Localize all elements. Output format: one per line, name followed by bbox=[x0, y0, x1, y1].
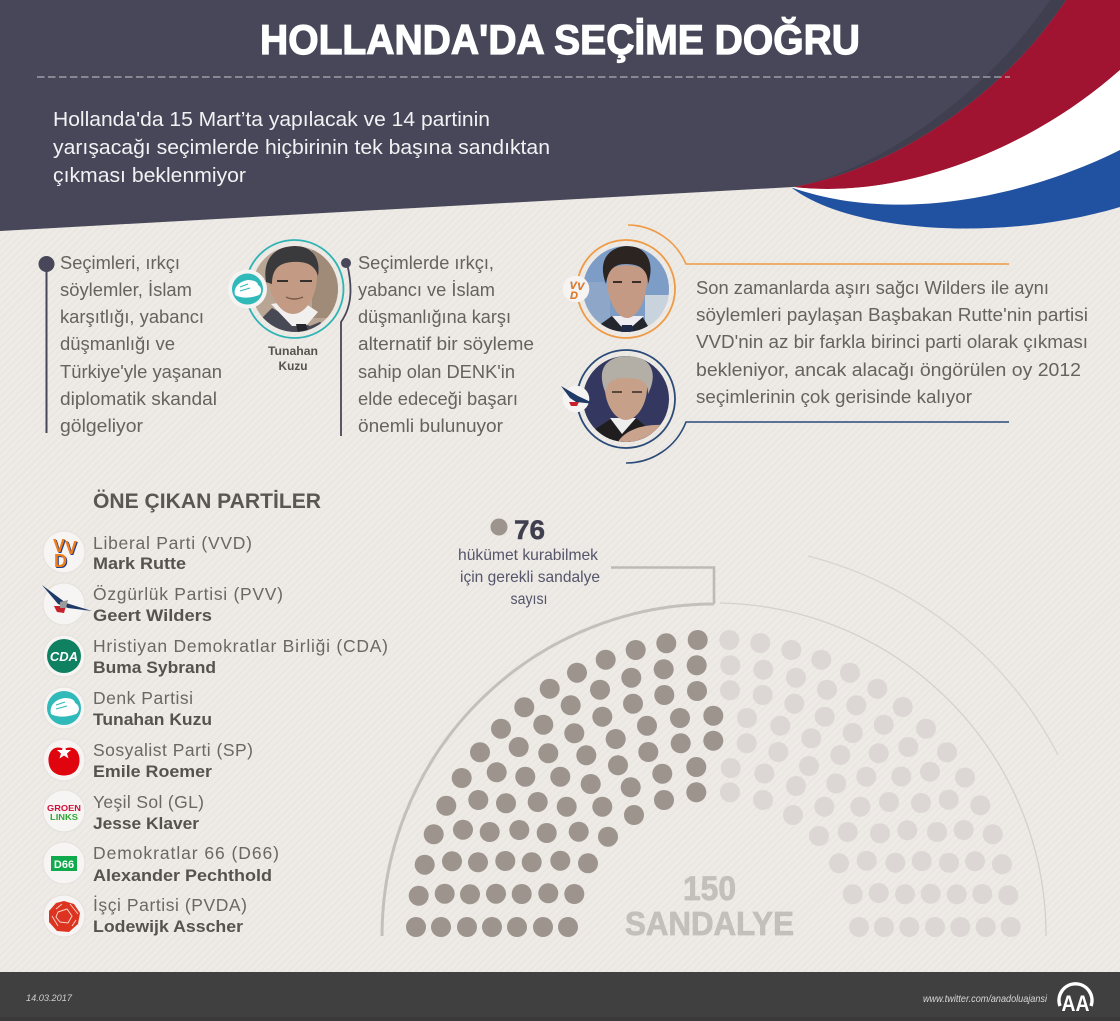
title divider bbox=[37, 76, 1010, 78]
party: Denk: Tunahan Kuzu bbox=[93, 710, 212, 729]
navy arc bbox=[626, 422, 1009, 463]
callout: 76 seats: hükümet kurabilmek bbox=[458, 547, 599, 564]
portrait caption: Kuzu bbox=[278, 359, 308, 373]
party: Denk bbox=[43, 687, 212, 729]
flag: white stripe bbox=[793, 70, 1120, 205]
text block: right column: Son zamanlarda aşırı sağcı Wilders ile aynı bbox=[696, 278, 1049, 298]
header band bbox=[0, 0, 1120, 231]
text block: middle column: düşmanlığına karşı bbox=[358, 307, 511, 327]
portrait: Geert Wilders bbox=[561, 350, 1009, 463]
party: D66: Alexander Pechthold bbox=[93, 866, 272, 885]
intro text: yarışacağı seçimlerde hiçbirinin tek başına sandıktan bbox=[53, 136, 550, 159]
party: VVD bbox=[43, 531, 252, 573]
intro text bbox=[53, 108, 550, 187]
party: SP bbox=[43, 739, 253, 781]
portrait: Tunahan Kuzu bbox=[228, 240, 344, 338]
badge: PVV bbox=[561, 386, 595, 412]
text block: right column bbox=[696, 278, 1088, 407]
party: PVDA bbox=[43, 895, 247, 937]
text block: middle column: yabancı ve İslam bbox=[358, 280, 495, 300]
text block: middle column: elde edeceği başarı bbox=[358, 389, 518, 409]
party: GL: Yeşil Sol (GL) bbox=[93, 792, 204, 812]
party: PVV bbox=[42, 583, 283, 625]
party: VVD: Liberal Parti (VVD) bbox=[93, 533, 252, 553]
portrait: Mark Rutte bbox=[563, 225, 1009, 338]
party: SP: Emile Roemer bbox=[93, 762, 212, 781]
bullet line bbox=[38, 256, 54, 433]
text block: middle column: alternatif bir söyleme bbox=[358, 334, 534, 354]
callout: 76 seats bbox=[458, 515, 600, 608]
party: PVV: Geert Wilders bbox=[93, 606, 212, 625]
party list bbox=[42, 531, 388, 937]
arc: parliament thin right bbox=[720, 603, 1046, 936]
party: PVDA: Lodewijk Asscher bbox=[93, 917, 243, 936]
heading: featured parties: ÖNE ÇIKAN PARTİLER bbox=[93, 490, 321, 513]
party: PVV: Özgürlük Partisi (PVV) bbox=[93, 584, 283, 604]
party: CDA: CDA bbox=[50, 649, 78, 664]
flag: blue stripe bbox=[792, 150, 1120, 229]
badge: VVD: D bbox=[570, 290, 578, 302]
bracket connector bbox=[611, 568, 714, 604]
party: GL: Jesse Klaver bbox=[93, 814, 199, 833]
portrait caption bbox=[268, 344, 318, 373]
intro text: Hollanda'da 15 Mart’ta yapılacak ve 14 partinin bbox=[53, 108, 490, 131]
text block: left column: düşmanlığı ve bbox=[60, 334, 175, 354]
text block: right column: seçimlerinin çok gerisinde kalıyor bbox=[696, 387, 972, 407]
date: 14.03.2017 bbox=[26, 993, 73, 1004]
badge: VVD bbox=[563, 276, 589, 302]
party: GL: LINKS bbox=[50, 812, 78, 822]
text block: left column: diplomatik skandal bbox=[60, 389, 217, 409]
party: D66: Demokratlar 66 (D66) bbox=[93, 843, 279, 863]
text block: middle column: Seçimlerde ırkçı, bbox=[358, 253, 494, 273]
badge: VVD: V bbox=[570, 280, 578, 292]
text block: right column: söylemleri paylaşan Başbakan Rutte'nin partisi bbox=[696, 305, 1088, 325]
callout: 76 seats: için gerekli sandalye bbox=[460, 569, 600, 586]
party: Denk: Denk Partisi bbox=[93, 688, 193, 708]
party: VVD: Mark Rutte bbox=[93, 554, 186, 573]
badge: VVD: V bbox=[577, 281, 586, 293]
twitter address: www.twitter.com/anadoluajansi bbox=[923, 993, 1048, 1005]
party: GL bbox=[43, 790, 204, 833]
icon: AA logo bbox=[1059, 984, 1092, 1016]
flag curve: shadow bbox=[793, 0, 1066, 187]
portrait caption: Tunahan bbox=[268, 344, 318, 358]
party: VVD: V bbox=[53, 536, 65, 556]
badge: Denk bbox=[228, 270, 267, 308]
text block: left column: Seçimleri, ırkçı bbox=[60, 253, 180, 273]
seats: majority 76 bbox=[406, 630, 723, 937]
text block: left column bbox=[38, 253, 222, 436]
total seats label bbox=[625, 870, 794, 942]
text block: middle column: sahip olan DENK'in bbox=[358, 362, 515, 382]
party: CDA: Buma Sybrand bbox=[93, 658, 216, 677]
icon: AA logo: AA bbox=[1062, 991, 1090, 1016]
callout: 76 seats: 76 bbox=[514, 515, 545, 545]
text block: middle column: önemli bulunuyor bbox=[358, 416, 503, 436]
text block: middle column bbox=[341, 253, 534, 436]
footer bar bbox=[0, 972, 1120, 1021]
party: PVDA: İşçi Partisi (PVDA) bbox=[93, 895, 247, 915]
title: HOLLANDA'DA SEÇİME DOĞRU bbox=[260, 16, 860, 63]
flag: red stripe bbox=[793, 0, 1120, 189]
text block: left column: söylemler, İslam bbox=[60, 280, 192, 300]
party: D66: D66 bbox=[54, 859, 74, 871]
orange arc bbox=[628, 225, 1009, 264]
text block: left column: karşıtlığı, yabancı bbox=[60, 307, 204, 327]
party: CDA bbox=[43, 635, 388, 677]
intro text: çıkması beklenmiyor bbox=[53, 164, 246, 187]
text block: left column: Türkiye'yle yaşanan bbox=[60, 362, 222, 382]
party: VVD: V bbox=[65, 538, 77, 558]
arc: outer thin bbox=[808, 556, 1058, 755]
callout: 76 seats: sayısı bbox=[510, 591, 548, 608]
party: D66 bbox=[43, 842, 279, 885]
party: VVD: D bbox=[54, 551, 67, 571]
total seats label: SANDALYE bbox=[625, 905, 794, 942]
text block: left column: gölgeliyor bbox=[60, 416, 143, 436]
bullet line bbox=[341, 258, 351, 436]
party: SP: Sosyalist Parti (SP) bbox=[93, 740, 253, 760]
party: GL: GROEN bbox=[47, 803, 81, 813]
party: CDA: Hristiyan Demokratlar Birliği (CDA) bbox=[93, 636, 388, 656]
seats: remaining 74 bbox=[719, 630, 1021, 937]
total seats label: 150 bbox=[683, 870, 736, 908]
text block: right column: VVD'nin az bir farkla birinci parti olarak çıkması bbox=[696, 332, 1088, 352]
text block: right column: bekleniyor, ancak alacağı öngörülen oy 2012 bbox=[696, 360, 1081, 380]
arc: parliament thick left bbox=[382, 604, 714, 936]
